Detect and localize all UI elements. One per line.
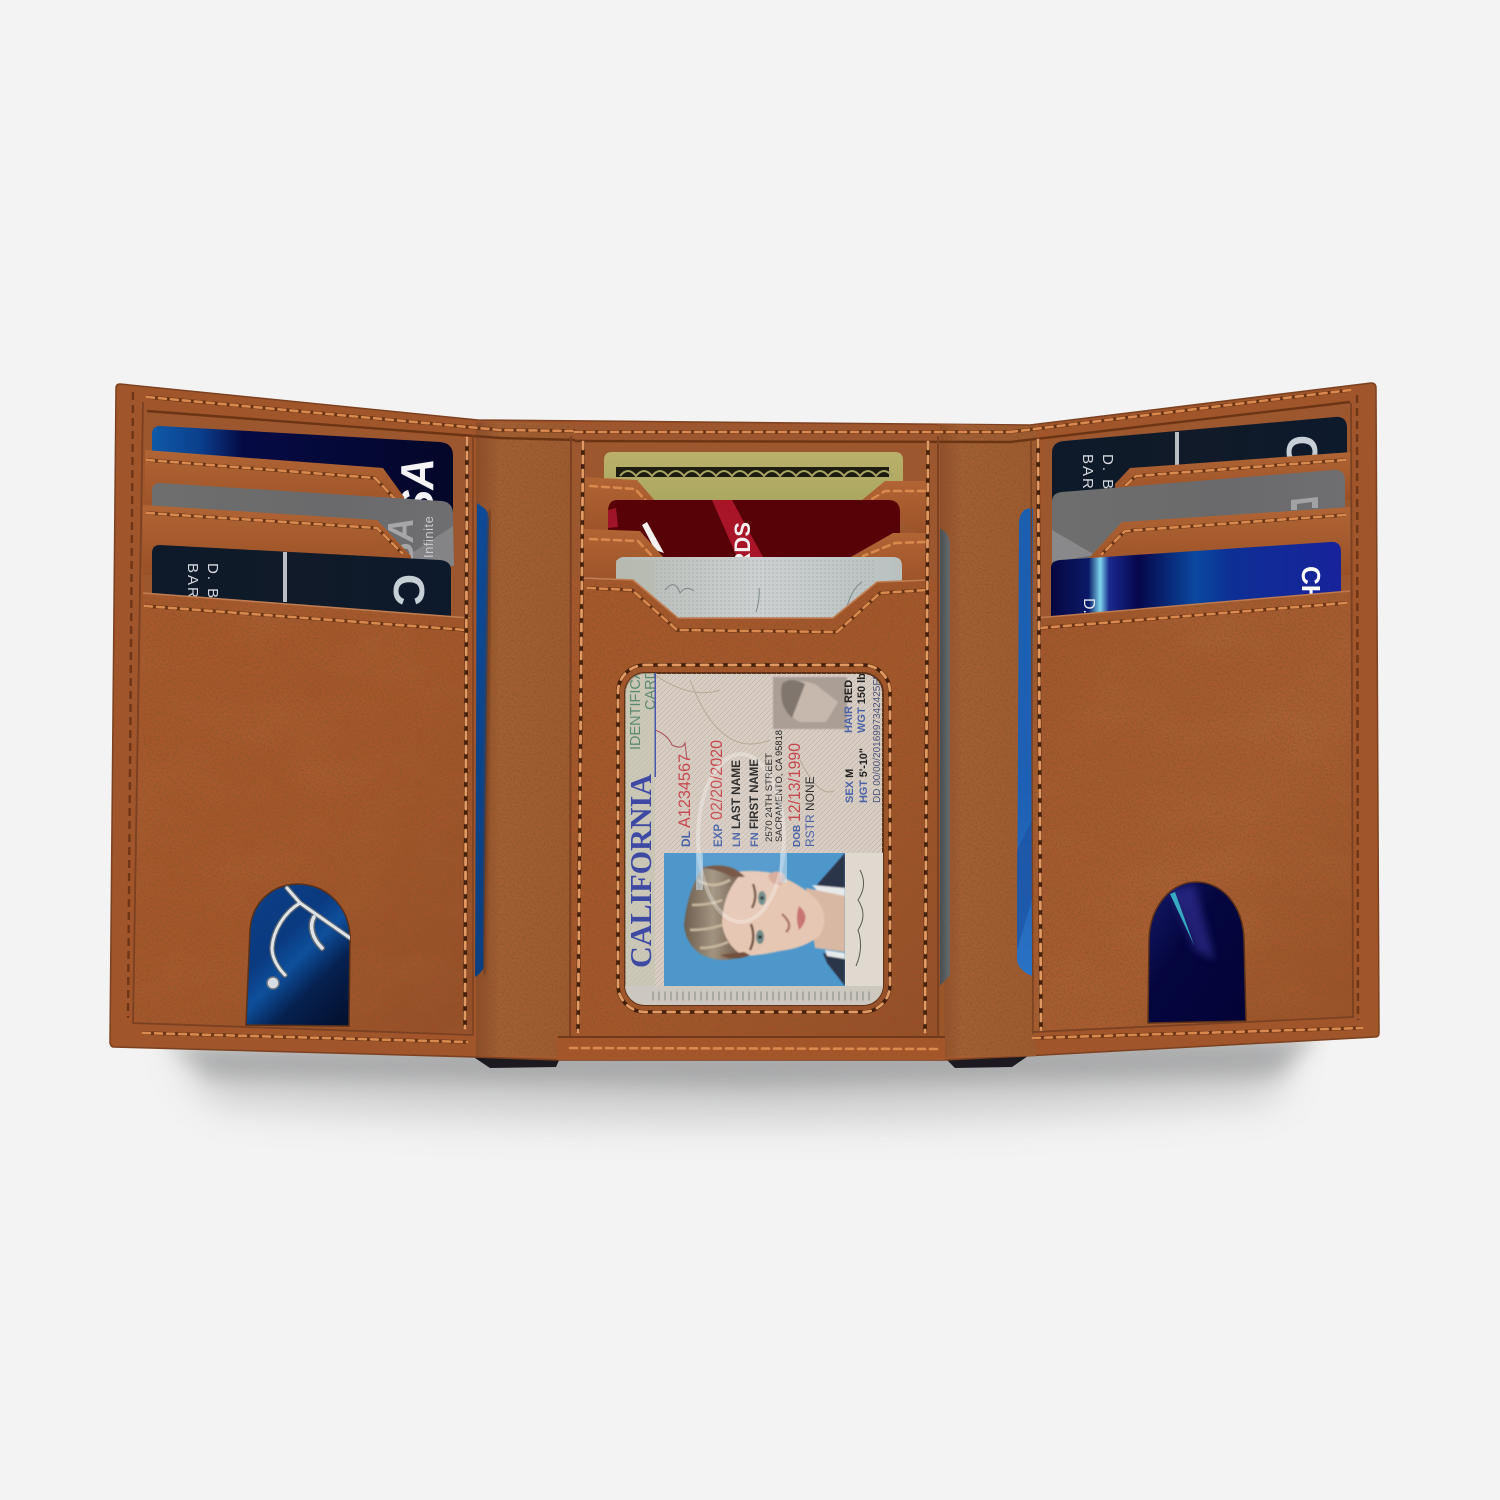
ID portrait photo — [664, 853, 845, 986]
ID text lines: SACRAMENTO, CA 95818 — [774, 730, 784, 842]
center panel — [570, 424, 940, 1038]
ID text lines: A1234567 — [676, 754, 694, 828]
ID text lines: DL — [679, 831, 693, 847]
ID text lines: HAIR RED — [843, 680, 855, 733]
card: gold — [604, 452, 903, 510]
ID text lines: IDENTIFICATION — [628, 636, 644, 750]
card: blue Chase right: CH — [1296, 566, 1326, 604]
ID window stitching — [618, 665, 890, 1012]
left front pocket — [130, 590, 475, 1035]
center panel recess — [572, 424, 940, 620]
center front pocket — [570, 578, 940, 1038]
right panel edge stitching — [1010, 390, 1362, 1038]
card: dark Chase — [152, 545, 451, 620]
California ID card — [623, 636, 883, 1005]
hologram ring — [698, 754, 784, 922]
ID text lines: WGT 150 lb — [856, 673, 868, 733]
ghost portrait — [773, 677, 847, 729]
card: dark Chase: D. B — [204, 563, 221, 600]
right spine with blue card edge — [936, 424, 1036, 1058]
ID text lines: HGT 5'-10" — [858, 748, 870, 803]
center pocket flaps lower — [584, 529, 930, 590]
card pocket flap 2 — [143, 505, 411, 575]
card: grey Visa Infinite — [152, 483, 454, 596]
card: dark Chase right — [1052, 417, 1347, 510]
icon: silver antler logo — [272, 888, 350, 975]
left thumb cutout card — [246, 884, 350, 1026]
card: dark Chase: C — [384, 574, 433, 606]
wallet drop shadow — [165, 1034, 1320, 1120]
card: silver ID back — [616, 557, 902, 625]
card: blue Chase right: D. — [1080, 598, 1097, 614]
right thumb cutout card — [1148, 882, 1246, 1023]
ID text lines: LN — [731, 832, 743, 847]
ID text lines: FIRST NAME — [747, 759, 761, 829]
spine underside gaps — [472, 1056, 1028, 1068]
card: red rewards: REWARDS — [730, 522, 755, 634]
ID text lines: SEX M — [844, 769, 856, 803]
ID text lines: CALIFORNIA — [623, 773, 658, 968]
wallet leather base — [110, 383, 1379, 1060]
ID text lines: DOB — [792, 825, 803, 847]
ID text lines: CARD — [643, 669, 659, 710]
card: dark Chase right: C — [1277, 435, 1326, 467]
ID text lines: EXP — [713, 824, 725, 847]
card: grey right — [1052, 470, 1345, 565]
center grey card edge — [937, 528, 950, 989]
ID text lines: RSTR NONE — [803, 776, 817, 847]
card: red rewards — [608, 500, 900, 634]
right panel recess — [1042, 402, 1351, 622]
ID text lines: 2570 24TH STREET — [764, 752, 774, 842]
thumb card light streak — [1170, 885, 1215, 960]
card: grey Visa Infinite: VISA — [380, 518, 421, 596]
icon: silver logo dot — [267, 977, 279, 989]
left panel edge stitching — [128, 392, 575, 1042]
ID text lines: LAST NAME — [729, 760, 743, 829]
ID text lines: DD 00/00/2016997342425FD — [872, 672, 883, 803]
card: blue Visa — [152, 426, 453, 560]
right pocket flap 1 — [1115, 452, 1352, 500]
left panel — [130, 411, 475, 1035]
center pocket flaps upper — [584, 477, 930, 540]
center panel stitching — [570, 432, 1010, 1036]
center bottom band — [556, 1036, 945, 1060]
card: dark Chase right: BAR — [1079, 454, 1096, 491]
ID text lines — [630, 673, 880, 966]
ID text lines: 12/13/1990 — [786, 743, 804, 822]
left panel recess — [145, 411, 470, 622]
wallet illustration — [109, 382, 1380, 1136]
card: blue Visa: VISA — [391, 458, 443, 560]
card: blue Chase right — [1051, 542, 1341, 622]
right pocket flap 2 — [1089, 507, 1352, 575]
card: grey Visa Infinite: Infinite — [421, 516, 436, 558]
card pocket flap 1 — [145, 450, 404, 520]
card: dark Chase right: D. B — [1099, 454, 1116, 491]
card: dark Chase: BAR — [184, 563, 201, 600]
right front pocket — [1032, 590, 1356, 1035]
ID text lines: 02/20/2020 — [708, 740, 726, 820]
right panel — [1032, 402, 1356, 1035]
left spine with blue card edge — [475, 422, 572, 1058]
ID text lines: FN — [749, 832, 761, 847]
